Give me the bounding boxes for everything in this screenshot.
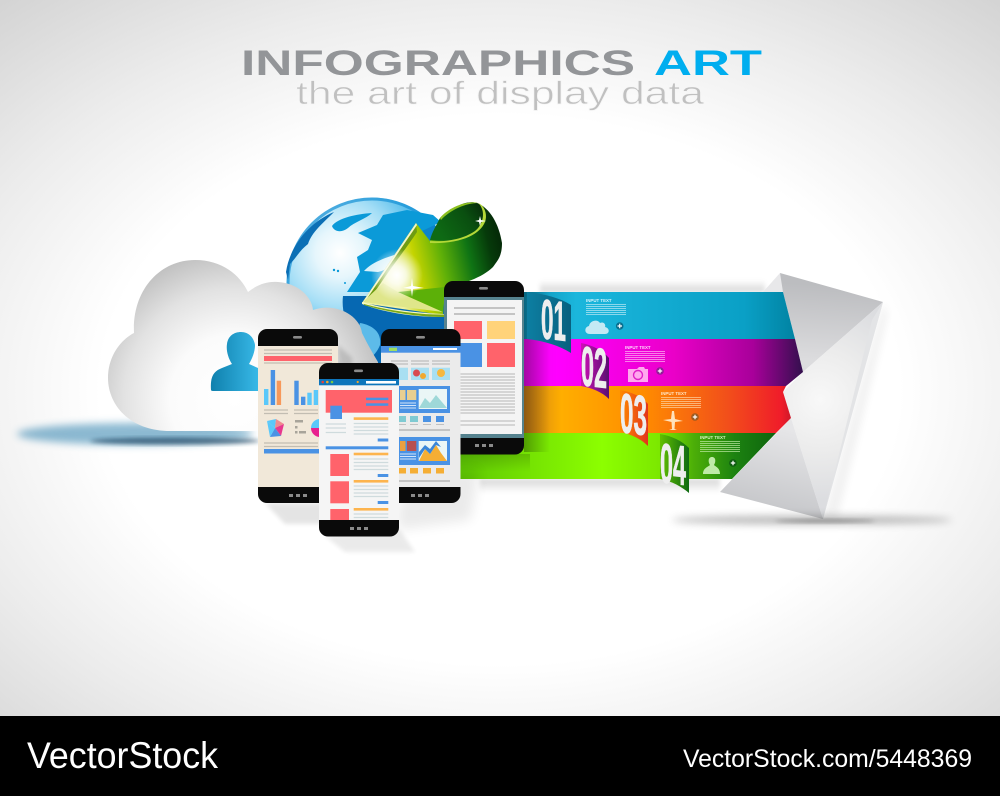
band 2 magenta	[500, 339, 803, 386]
icon: airplane	[663, 411, 683, 430]
ribbon 4 tag	[660, 431, 689, 497]
title: ART	[654, 44, 762, 83]
arrow head highlight	[371, 249, 423, 301]
Mediterranean	[364, 254, 397, 272]
text: 02	[581, 334, 607, 400]
icon: green arrow	[362, 202, 502, 317]
shadow above ribbons	[540, 280, 765, 292]
phone: charts	[258, 329, 338, 503]
upper right ocean	[402, 223, 457, 290]
left crescent continent	[286, 212, 334, 280]
pentagon pie chart	[267, 419, 284, 437]
cloud ground shadow	[17, 423, 260, 445]
ribbon 1 content	[585, 298, 626, 334]
round pie chart	[311, 419, 320, 437]
ribbon 2 content: INPUT TEXT	[625, 345, 651, 350]
icon: plus	[656, 367, 664, 375]
title: INFOGRAPHICS	[241, 44, 635, 83]
phone: front article	[319, 363, 399, 536]
globe	[286, 198, 458, 368]
cloud	[108, 260, 378, 431]
arrow tail opening	[430, 202, 484, 241]
phone shade on bands	[524, 292, 550, 452]
sparkles	[403, 278, 424, 297]
phone: tablet with layout	[444, 281, 524, 454]
band 4 green	[460, 433, 776, 479]
arrow head left edge	[362, 223, 417, 303]
phone: dashboard	[381, 329, 460, 503]
ribbon 4 content: INPUT TEXT	[700, 435, 726, 440]
text: 01	[541, 287, 566, 353]
footer bar	[0, 716, 1000, 796]
ribbon 3 content	[661, 391, 701, 430]
icon: person in cloud	[211, 332, 262, 391]
globe continents	[332, 210, 441, 292]
icon: plus	[729, 459, 737, 467]
arrow head lower facet	[363, 283, 443, 312]
ribbon 2 content	[625, 345, 665, 382]
bottom ocean	[343, 290, 457, 368]
ribbon 2 tag	[581, 334, 609, 400]
icon: plus	[691, 413, 699, 421]
phone long shadows	[265, 345, 480, 552]
ribbon bands	[460, 292, 803, 479]
arrow bottom rim	[362, 302, 444, 317]
text: 04	[660, 431, 686, 497]
ribbon 3 content: INPUT TEXT	[661, 391, 687, 396]
icon: plus	[616, 322, 624, 330]
envelope ground shadow	[672, 516, 952, 524]
footer url: VectorStock.com/5448369	[683, 745, 972, 773]
bar chart right	[294, 381, 318, 405]
band 3 orange	[500, 386, 791, 433]
3D envelope shape	[720, 273, 888, 519]
ribbon 3 tag	[620, 381, 648, 447]
bar chart left	[264, 370, 281, 405]
footer logo: VectorStock	[27, 735, 218, 776]
title	[241, 44, 762, 83]
ribbon 1 content: INPUT TEXT	[586, 298, 612, 303]
icon: camera	[628, 367, 648, 382]
icon: person	[703, 457, 720, 474]
phone shade on green band	[460, 454, 530, 472]
band 1 blue	[520, 292, 795, 339]
ribbon 1 tag	[527, 287, 571, 353]
ribbon 4 content	[700, 435, 740, 474]
shadow below ribbons	[480, 479, 720, 493]
arrow body	[362, 202, 502, 315]
subtitle: the art of display data	[296, 75, 704, 111]
icon: cloud	[585, 321, 609, 334]
text: 03	[620, 381, 647, 447]
